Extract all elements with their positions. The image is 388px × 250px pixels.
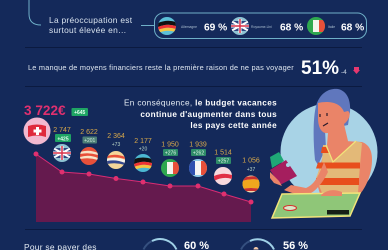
text: budget conclusion: continue d'augmenter dans tous (140, 110, 277, 119)
text: main reason: Le manque de moyens financiers reste la première raison de ne pas voyager (28, 63, 294, 72)
chart: budget by country (24, 103, 260, 222)
ring: 56% (241, 239, 274, 250)
France: +262 (193, 150, 204, 156)
connector curve (29, 0, 154, 26)
Spain (242, 158, 260, 193)
value: United Kingdom: 68 % (280, 22, 303, 34)
Italy (161, 142, 179, 177)
country pill (154, 13, 366, 38)
trend line (36, 154, 251, 202)
text: preoccupation: surtout élevée en… (49, 25, 127, 35)
flag: Germany (158, 17, 176, 35)
Netherlands or similar: 2 364 (107, 133, 125, 140)
panel: financial reason (28, 58, 360, 79)
Spain or similar: +201 (84, 138, 96, 144)
map route (284, 206, 296, 210)
text: budget conclusion: En conséquence, le budget vacances (124, 98, 277, 108)
top stripes (316, 147, 360, 185)
Italy: 1 950 (161, 142, 179, 148)
Italy: +276 (165, 150, 176, 156)
France: 1 939 (189, 142, 207, 148)
panel: preoccupation (29, 0, 366, 38)
change: -4: -4 (341, 69, 347, 76)
United Kingdom: 2 747 (53, 127, 71, 134)
value: Italy: 68 % (341, 22, 364, 34)
top neckline (326, 141, 356, 162)
background circle (280, 104, 378, 200)
area (36, 154, 251, 222)
face and neck (318, 102, 350, 154)
text: budget conclusion: les pays cette année (190, 121, 277, 130)
Germany: 2 177 (134, 138, 152, 145)
points (34, 152, 254, 204)
Spain: +37 (247, 167, 255, 173)
far arm and torso (316, 141, 372, 194)
United Kingdom (53, 127, 71, 162)
label: Royaume-Uni: Royaume-Uni (251, 25, 272, 29)
Netherlands or similar (107, 133, 125, 169)
Spain or similar (80, 129, 98, 165)
Poland or similar (214, 150, 232, 185)
ring: 60% (144, 239, 176, 250)
label: Italie: Italie (328, 25, 335, 29)
hand on map (321, 190, 342, 196)
flag: United Kingdom (231, 17, 249, 35)
Germany (134, 138, 152, 172)
Switzerland: 3 722€ (24, 103, 66, 118)
Switzerland: +645 (74, 110, 86, 116)
arm (284, 162, 328, 195)
text: preoccupation: La préoccupation est (49, 15, 132, 25)
value: 51%: 51% (301, 58, 339, 79)
map (272, 193, 360, 218)
wallet (270, 152, 297, 186)
Netherlands or similar: +73 (112, 142, 120, 148)
Spain or similar: 2 622 (80, 129, 98, 136)
face features (320, 113, 328, 126)
icon: down arrow (353, 67, 360, 74)
Switzerland (24, 103, 88, 144)
hair (314, 89, 350, 165)
value: Germany: 69 % (204, 22, 227, 34)
Spain: 1 056 (242, 158, 260, 164)
icon dot (254, 247, 258, 250)
Poland or similar: 1 514 (214, 150, 232, 156)
flag: Italy (307, 17, 325, 35)
Poland or similar: +257 (218, 158, 229, 164)
illustration: woman with map and wallet (270, 89, 378, 218)
top (316, 141, 362, 193)
map legend (327, 210, 349, 214)
France (189, 142, 207, 177)
United Kingdom: +425 (57, 136, 69, 142)
Germany: +20 (139, 146, 147, 152)
label: Allemagne: Allemagne (181, 25, 197, 29)
